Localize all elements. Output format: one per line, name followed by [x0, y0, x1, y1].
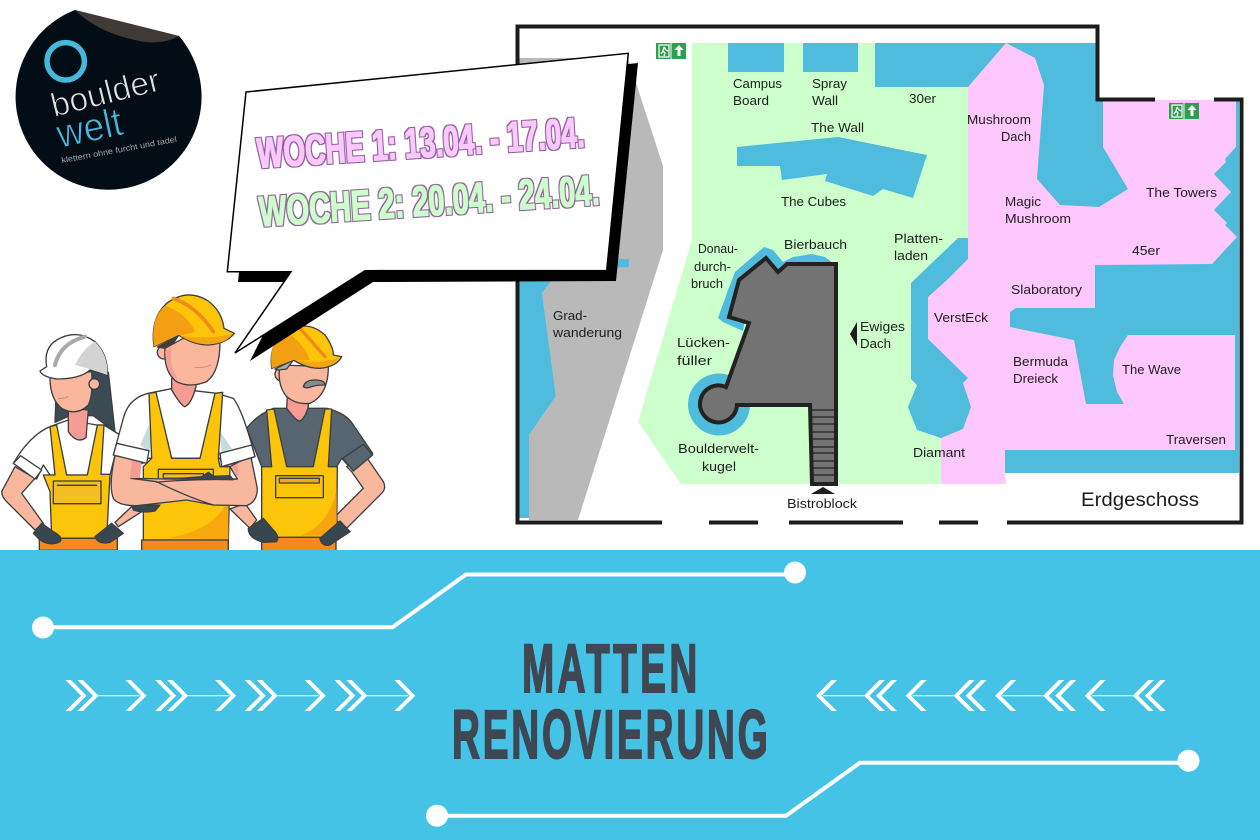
map labels: Ewiges [860, 319, 906, 334]
map labels: Dach [1001, 129, 1031, 144]
map labels: wanderung [552, 325, 622, 340]
central grey block with stairs [700, 258, 836, 484]
wall: Campus Board [728, 43, 784, 72]
circuit line top [32, 562, 806, 638]
speech bubble with dates [227, 53, 638, 361]
marker: Bistroblock triangle [811, 487, 835, 494]
map labels: The Wall [811, 120, 864, 135]
wall: Donaudurchbruch and Bierbauch [718, 247, 833, 331]
floor plan [518, 26, 1242, 522]
map labels: Bermuda [1013, 354, 1069, 369]
wall: Verstelleck and Diamant [908, 238, 971, 438]
map labels: 30er [909, 91, 937, 106]
worker: older man with moustache [230, 326, 385, 551]
title: RENOVIERUNG [452, 695, 768, 773]
map labels: Campus [733, 76, 782, 91]
wall: Spray Wall [803, 43, 858, 72]
map labels: Magic [1005, 194, 1042, 209]
workers illustration [2, 295, 385, 551]
outer building wall [518, 26, 1242, 522]
bubble shadow [238, 63, 638, 361]
map labels: 45er [1132, 243, 1161, 258]
map labels: The Cubes [781, 194, 847, 209]
title [452, 629, 768, 773]
dates: week 2: WOCHE 2: 20.04. - 24.04. [258, 167, 601, 236]
map labels: Mushroom [1005, 211, 1071, 226]
map labels: Boulderwelt- [678, 441, 759, 456]
zone: green area [638, 43, 975, 484]
logo peeled corner [75, 10, 179, 42]
logo: boulderwelt sticker [16, 10, 202, 190]
map labels: bruch [691, 276, 723, 291]
map labels: Bistroblock [787, 496, 858, 511]
arrows pointing right [66, 680, 415, 711]
map labels: Traversen [1166, 432, 1226, 447]
map labels: laden [894, 248, 928, 263]
wall: Boulderweltkugel [688, 374, 750, 436]
map labels: Lücken- [677, 335, 730, 350]
map labels: Erdgeschoss [1081, 490, 1199, 511]
title: MATTEN [522, 629, 697, 707]
map labels: durch- [694, 259, 731, 274]
map labels: Dach [860, 336, 891, 351]
logo disc [16, 10, 202, 190]
marker: Ewiges Dach triangle [850, 322, 857, 346]
icon: emergency exit sign 2 [1169, 103, 1199, 119]
map labels: Bierbauch [784, 237, 847, 252]
dates: week 1: WOCHE 1: 13.04. - 17.04. [256, 109, 586, 178]
map labels: Board [733, 93, 769, 108]
logo word: boulder: boulder [47, 61, 163, 124]
zone: grey Gradwanderung area [519, 58, 663, 520]
bubble body [227, 53, 628, 353]
worker: woman with white helmet [2, 335, 142, 550]
map labels: Donau- [698, 241, 738, 256]
map labels: The Towers [1146, 185, 1218, 200]
zone: pink area [928, 43, 1237, 484]
map labels: Mushroom [967, 112, 1031, 127]
map labels: Grad- [553, 308, 587, 323]
circuit line bottom [426, 750, 1200, 827]
zone: blue wall along left side [519, 259, 629, 518]
map labels: Diamant [913, 445, 965, 460]
arrows pointing left [816, 680, 1166, 711]
map labels: Wall [812, 93, 838, 108]
worker: centre man with crossed arms [111, 295, 257, 551]
map labels: Dreieck [1013, 371, 1058, 386]
map labels: füller [677, 353, 713, 368]
logo word: welt: welt [52, 100, 126, 157]
bottom banner [0, 550, 1260, 840]
icon: emergency exit sign 1 [656, 43, 686, 59]
map labels: Platten- [894, 231, 943, 246]
map labels: The Wave [1122, 362, 1181, 377]
map labels: Spray [812, 76, 848, 91]
logo ring [47, 43, 84, 80]
map labels [552, 76, 1226, 511]
logo tagline: klettern ohne furcht und tadel [61, 135, 178, 165]
map labels: VerstEck [934, 310, 989, 325]
wall: The Wall [737, 137, 927, 198]
zone: blue walls on the right [875, 43, 1239, 473]
map labels: Slaboratory [1011, 282, 1083, 297]
map labels: kugel [702, 459, 736, 474]
banner background [0, 550, 1260, 840]
